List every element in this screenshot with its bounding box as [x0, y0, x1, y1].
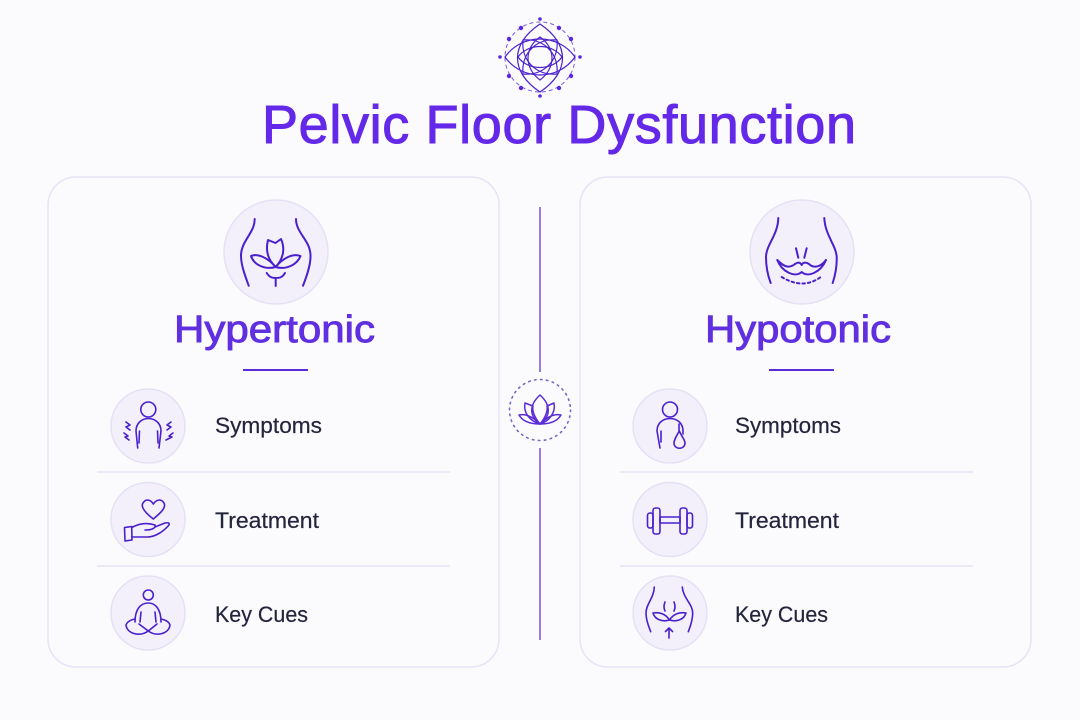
- row: treatment: Treatment: [735, 508, 839, 533]
- icon: center lotus: [510, 380, 570, 440]
- row: key cues: [633, 576, 828, 650]
- icon: pelvis with sagging floor: [750, 200, 854, 304]
- row: symptoms: Symptoms: [735, 413, 841, 438]
- panel: hypertonic: [48, 177, 499, 667]
- row: treatment: [111, 482, 319, 556]
- row: symptoms: [633, 389, 841, 463]
- panel: hypotonic: [580, 177, 1031, 667]
- heading underline: [769, 369, 834, 371]
- row: treatment: Treatment: [215, 508, 319, 533]
- row: symptoms: Symptoms: [215, 413, 322, 438]
- row: symptoms: [111, 389, 322, 463]
- center divider line: [539, 207, 541, 640]
- row: key cues: Key Cues: [735, 602, 828, 627]
- row: key cues: [111, 576, 308, 650]
- icon: pelvis with flower: [224, 200, 328, 304]
- title: Pelvic Floor Dysfunction: [262, 95, 856, 155]
- heading: hypertonic: Hypertonic: [174, 309, 375, 351]
- heading: hypotonic: Hypotonic: [705, 309, 891, 351]
- heading underline: [243, 369, 308, 371]
- row: key cues: Key Cues: [215, 602, 308, 627]
- emblem: sacred geometry mandala: [498, 17, 582, 98]
- row: treatment: [633, 482, 839, 556]
